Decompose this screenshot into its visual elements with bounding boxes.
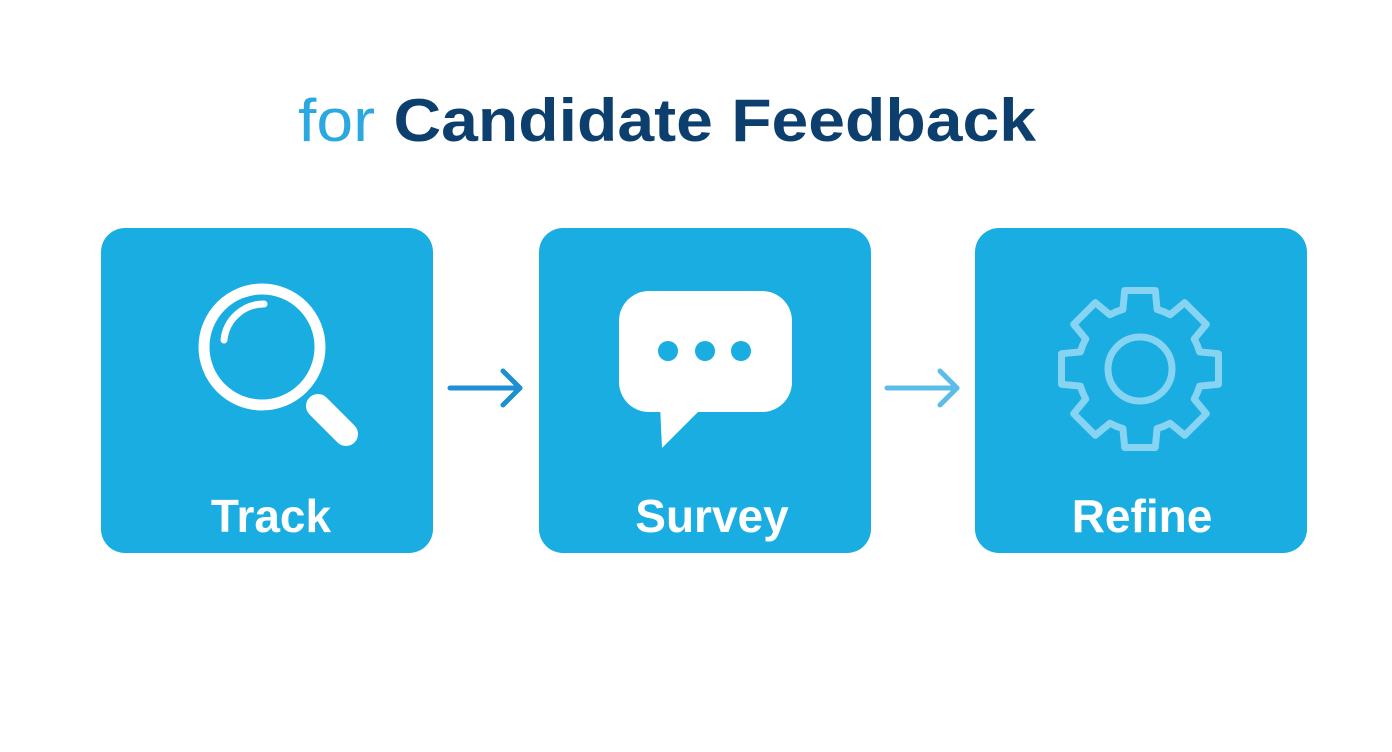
arrow 2 (887, 371, 957, 405)
arrow 1 (450, 371, 520, 405)
icon: chat bubble (619, 291, 792, 448)
panel: refine (975, 228, 1307, 553)
label: track: Track (211, 490, 332, 542)
panel: survey (539, 228, 871, 553)
icon: gear (1062, 290, 1218, 448)
label: survey: Survey (635, 490, 789, 542)
icon: magnifier (204, 289, 346, 434)
title: for Candidate Feedback (298, 87, 1037, 154)
label: refine: Refine (1072, 490, 1212, 542)
panel: track (101, 228, 433, 553)
